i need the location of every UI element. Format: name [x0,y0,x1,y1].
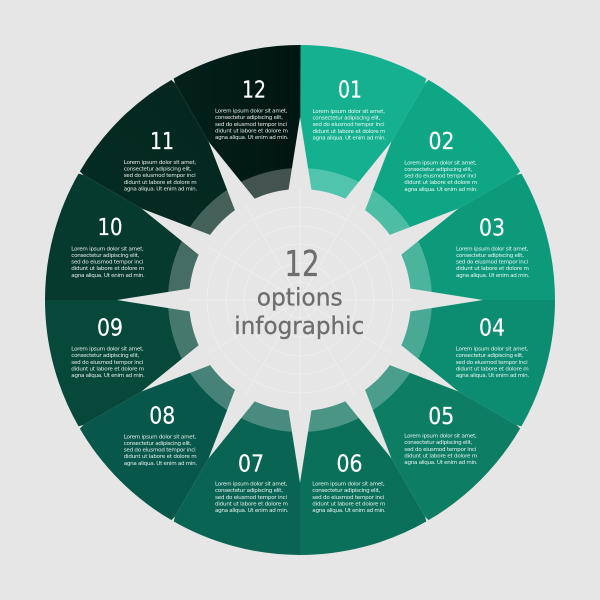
sector 06 [300,300,428,555]
text 09: Lorem ipsum dolor sit amet, [71,347,144,353]
number 06: 06 [336,450,362,478]
outer rim nicks [77,77,523,523]
text 06: sed do eiusmod tempor inci [312,495,385,501]
text 09: consectetur adipiscing elit, [71,353,140,359]
number 08: 08 [149,402,175,430]
centre title: options [257,284,343,312]
text 05: didunt ut labore et dolore m [404,454,477,460]
text 04: consectetur adipiscing elit, [456,353,524,359]
segment 02 [300,79,521,300]
text 04: sed do eiusmod tempor inci [456,360,528,366]
text 02: sed do eiusmod tempor inci [404,174,477,180]
polar grid [189,189,411,411]
segment 08 [79,300,300,521]
text 10 [71,246,145,279]
centre title: infographic [234,312,364,340]
text 03: Lorem ipsum dolor sit amet, [456,246,529,252]
text 07: consectetur adipiscing elit, [215,488,283,494]
text 05 [404,434,478,466]
number 10: 10 [98,213,122,241]
text 06: Lorem ipsum dolor sit amet, [312,482,385,488]
segment 05 [300,300,521,521]
text 01 [312,109,386,142]
text 06: agna aliqua. Ut enim ad min. [312,508,386,514]
segment 09 [45,300,300,428]
text 09: agna aliqua. Ut enim ad min. [71,373,145,379]
text 10: didunt ut labore et dolore m [71,266,144,272]
text 03: sed do eiusmod tempor inci [456,260,528,266]
sector 10 [45,172,300,300]
sector 09 [45,300,300,428]
translucent ring [179,179,421,421]
text 08: Lorem ipsum dolor sit amet, [124,434,196,440]
number 04: 04 [479,314,505,342]
number 09: 09 [97,314,123,342]
text 04: didunt ut labore et dolore m [456,366,529,372]
text 08: consectetur adipiscing elit, [124,441,192,447]
text 08: sed do eiusmod tempor inci [124,448,196,454]
text 07: sed do eiusmod tempor inci [215,495,287,501]
text 02: Lorem ipsum dolor sit amet, [404,160,477,166]
segment 11 [79,79,300,300]
text 11: sed do eiusmod tempor inci [124,173,196,179]
segment 07 [172,300,300,555]
text 07 [215,482,289,514]
text 11: didunt ut labore et dolore m [124,180,197,186]
text 03 [456,246,530,279]
text 06 [312,482,386,514]
text 12 [215,109,289,141]
text 08: didunt ut labore et dolore m [124,454,197,460]
text 01: Lorem ipsum dolor sit amet, [312,109,385,115]
text 01: consectetur adipiscing elit, [312,116,381,122]
text 11: consectetur adipiscing elit, [124,167,192,173]
segment 06 [300,300,428,555]
text 01: sed do eiusmod tempor inci [312,122,385,128]
sector 12 [172,45,300,300]
number 07: 07 [238,450,264,478]
text 12: Lorem ipsum dolor sit amet, [215,109,288,115]
text 11 [124,160,197,192]
sector 05 [300,300,521,521]
sector 03 [300,172,555,300]
text 12: sed do eiusmod tempor inci [215,122,287,128]
number 02: 02 [428,127,454,155]
sector 02 [300,79,521,300]
number 01: 01 [338,76,362,104]
text 03: agna aliqua. Ut enim ad min. [456,273,530,279]
segment 12 [172,45,300,300]
number 12: 12 [242,76,266,104]
text 10: consectetur adipiscing elit, [71,253,140,259]
number 05: 05 [428,402,454,430]
segment 01 [300,45,428,300]
sector 04 [300,300,555,428]
text 05: consectetur adipiscing elit, [404,440,473,446]
text 09 [71,347,145,379]
text 09: didunt ut labore et dolore m [71,366,144,372]
text 02: didunt ut labore et dolore m [404,180,477,186]
text 10: Lorem ipsum dolor sit amet, [71,246,144,252]
text 12: consectetur adipiscing elit, [215,115,283,121]
text 02: agna aliqua. Ut enim ad min. [404,187,478,193]
sector 01 [300,45,428,300]
star spikes [117,117,483,483]
centre title [234,244,364,340]
text 03: didunt ut labore et dolore m [456,266,529,272]
text 06: didunt ut labore et dolore m [312,502,385,508]
text 08: agna aliqua. Ut enim ad min. [124,461,197,467]
text 02: consectetur adipiscing elit, [404,167,473,173]
text 05: Lorem ipsum dolor sit amet, [404,434,477,440]
text 06: consectetur adipiscing elit, [312,488,381,494]
number 03: 03 [479,214,505,242]
sector 11 [79,79,300,300]
text 03: consectetur adipiscing elit, [456,253,524,259]
text 04 [456,347,529,379]
sector 07 [172,300,300,555]
text 01: agna aliqua. Ut enim ad min. [312,136,386,142]
text 10: agna aliqua. Ut enim ad min. [71,273,145,279]
segment 03 [300,172,555,300]
text 10: sed do eiusmod tempor inci [71,260,144,266]
text 04: agna aliqua. Ut enim ad min. [456,373,529,379]
text 05: agna aliqua. Ut enim ad min. [404,460,478,466]
segment 04 [300,300,555,428]
text 11: agna aliqua. Ut enim ad min. [124,186,197,192]
text 07: agna aliqua. Ut enim ad min. [215,508,289,514]
sector 08 [79,300,300,521]
text 12: didunt ut labore et dolore m [215,128,288,134]
text 05: sed do eiusmod tempor inci [404,447,477,453]
centre title: 12 [284,244,320,285]
segment 10 [45,172,300,300]
number 11: 11 [150,127,174,155]
text 11: Lorem ipsum dolor sit amet, [124,160,196,166]
text 01: didunt ut labore et dolore m [312,129,386,135]
text 09: sed do eiusmod tempor inci [71,360,144,366]
text 02 [404,160,478,193]
text 07: didunt ut labore et dolore m [215,502,288,508]
centre circle [189,189,411,411]
text 12: agna aliqua. Ut enim ad min. [215,135,289,141]
text 07: Lorem ipsum dolor sit amet, [215,482,288,488]
text 08 [124,434,197,467]
text 04: Lorem ipsum dolor sit amet, [456,347,528,353]
